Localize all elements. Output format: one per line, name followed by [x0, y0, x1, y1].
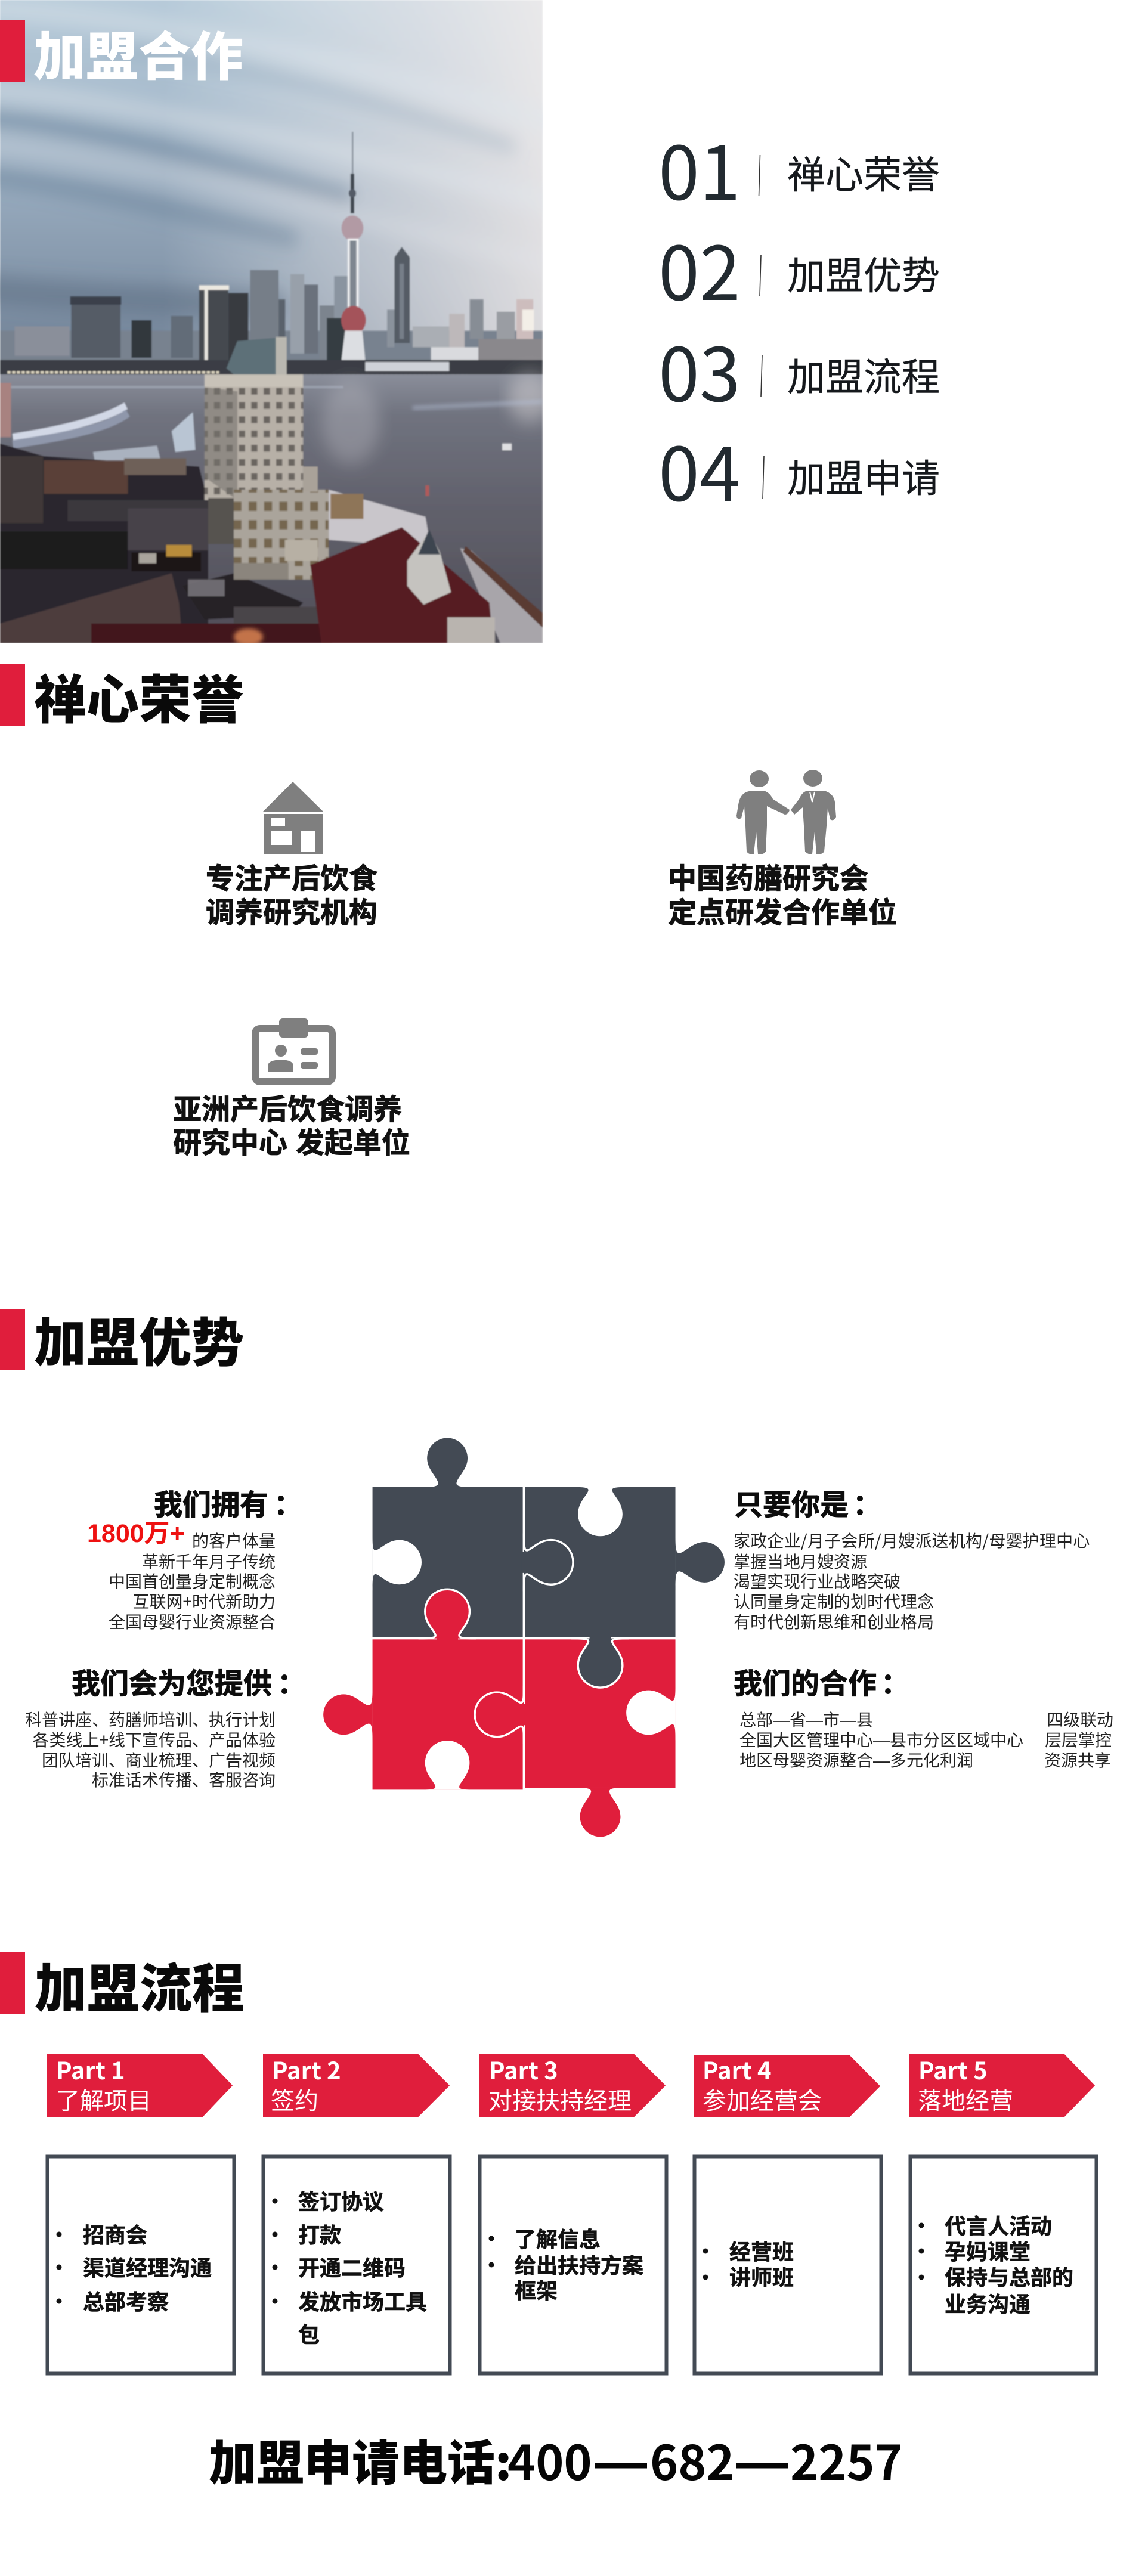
card: step 5 list: 保持与总部的 [945, 2261, 1073, 2292]
text block: 我们会为您提供: 我们会为您提供： [72, 1660, 306, 1702]
puzzle interlocks [419, 1533, 629, 1744]
item 02: 加盟优势 [787, 246, 940, 301]
text block: 我们拥有: 中国首创量身定制概念 [109, 1569, 276, 1593]
text block: 我们的合作: 总部—省—市—县 [739, 1707, 873, 1731]
text block: 只要你是: 渴望实现行业战略突破 [734, 1569, 900, 1593]
text block: 只要你是: 有时代创新思维和创业格局 [734, 1609, 934, 1633]
section bar: 加盟优势 [0, 1309, 25, 1370]
callout: application phone number: 682 [650, 2425, 735, 2494]
arrow: Part 3: 对接扶持经理 [488, 2082, 632, 2116]
text block: 我们的合作: 我们的合作： [734, 1660, 909, 1702]
card: step 2 list [264, 2156, 450, 2373]
text block: 只要你是 [734, 1481, 1090, 1633]
card: step 2 list: 打款 [298, 2218, 341, 2249]
text block: 我们拥有: 革新千年月子传统 [142, 1549, 276, 1573]
card: step 1 list: 渠道经理沟通 [83, 2251, 212, 2282]
card: step 3 list: 给出扶持方案 [515, 2249, 643, 2280]
item 03: 加盟流程 [787, 347, 940, 402]
honor text 1: 调养研究机构 [206, 889, 377, 931]
arrow: Part 2: 签约 [271, 2082, 318, 2116]
heading: 禅心荣誉: 禅心荣誉 [34, 658, 244, 734]
arrow: Part 3: Part 3 [489, 2052, 558, 2086]
text block: 我们拥有: 1800万+ [87, 1519, 185, 1548]
photo: Shanghai skyline and river [0, 0, 562, 645]
item 01: 01 [658, 114, 741, 221]
callout: application phone number: 400 [507, 2425, 592, 2494]
card: step 4 list [694, 2156, 881, 2373]
arrow: Part 4 [694, 2052, 880, 2117]
section bar: 禅心荣誉 [0, 664, 25, 726]
item 03 [658, 315, 940, 423]
text block: 我们会为您提供: 各类线上+线下宣传品、产品体验 [32, 1727, 276, 1751]
honor text 1: 专注产后饮食 [206, 855, 377, 897]
text block: 我们拥有: 全国母婴行业资源整合 [109, 1609, 276, 1633]
card: step 2 list: 签订协议 [298, 2185, 384, 2216]
section bar: 加盟流程 [0, 1952, 25, 2014]
honor text 3: 研究中心 发起单位 [173, 1119, 410, 1161]
text block: 只要你是: 只要你是： [734, 1481, 881, 1523]
sub: riverside embankment and red roofs [285, 485, 543, 643]
card: step 5 list: 业务沟通 [945, 2287, 1030, 2318]
arrow: Part 5 [909, 2052, 1095, 2117]
text block: 我们拥有: 互联网+时代新助力 [132, 1589, 276, 1613]
chart: four-piece jigsaw puzzle [323, 1438, 725, 1837]
card: step 1 list [48, 2156, 234, 2373]
text block: 只要你是: 认同量身定制的划时代理念 [734, 1589, 934, 1613]
item 04: 04 [658, 415, 741, 522]
card: step 2 list: 发放市场工具 [298, 2285, 427, 2316]
card: step 1 list: 招商会 [83, 2218, 147, 2249]
arrow: Part 1: Part 1 [56, 2052, 125, 2086]
sub: left city blocks [0, 444, 332, 645]
card: step 3 list: 了解信息 [515, 2222, 601, 2253]
card: step 5 list [910, 2156, 1096, 2373]
text block: 我们拥有: 我们拥有： [154, 1481, 302, 1523]
text block: 我们的合作: 资源共享 [1044, 1748, 1111, 1772]
text block: 我们的合作: 四级联动 [1047, 1707, 1113, 1731]
arrow: Part 5: Part 5 [918, 2052, 988, 2086]
arrow: Part 1 [47, 2052, 233, 2117]
arrow: Part 2: Part 2 [272, 2052, 341, 2086]
arrow: Part 1: 了解项目 [56, 2082, 151, 2116]
honor text 3: 亚洲产后饮食调养 [173, 1086, 402, 1128]
icon: house [263, 782, 323, 854]
callout: application phone number: — [595, 2432, 647, 2491]
item 04: 加盟申请 [787, 448, 940, 503]
puzzle piece: top dark [373, 1438, 725, 1637]
card: step 3 list: 框架 [515, 2274, 558, 2305]
puzzle notches [373, 1487, 676, 1789]
text block: 只要你是: 掌握当地月嫂资源 [734, 1549, 867, 1573]
arrow: Part 2 [263, 2052, 450, 2117]
heading: 加盟优势: 加盟优势 [34, 1301, 244, 1377]
card: step 1 list: 总部考察 [83, 2285, 169, 2316]
item 01: 禅心荣誉 [787, 145, 940, 200]
text block: 我们会为您提供: 团队培训、商业梳理、广告视频 [42, 1748, 276, 1772]
card: step 5 list: 代言人活动 [945, 2209, 1052, 2240]
text block: 我们会为您提供: 标准话术传播、客服咨询 [92, 1767, 276, 1791]
card: step 4 list: 讲师班 [729, 2261, 794, 2292]
item 02: 02 [658, 214, 741, 321]
text block: 只要你是: 家政企业/月子会所/月嫂派送机构/母婴护理中心 [734, 1528, 1090, 1552]
sub: far skyline [0, 247, 543, 376]
item 03: 03 [658, 315, 741, 423]
card: step 4 list: 经营班 [729, 2235, 794, 2266]
sub: hotel tower [205, 337, 329, 580]
sub: Oriental Pearl Tower [341, 132, 366, 360]
heading: 加盟流程: 加盟流程 [35, 1947, 245, 2023]
card: step 3 list [479, 2156, 667, 2373]
arrow: Part 4: 参加经营会 [703, 2082, 822, 2116]
table of contents [658, 114, 940, 522]
text block: 我们的合作: 层层掌控 [1045, 1727, 1112, 1751]
callout: application phone number: — [736, 2432, 788, 2491]
text block: 我们的合作: 全国大区管理中心—县市分区区域中心 [739, 1727, 1023, 1751]
callout: application phone number: 加盟申请电话: [209, 2425, 512, 2494]
honor text 2: 中国药膳研究会 [668, 855, 868, 897]
puzzle piece: bottom red [323, 1639, 676, 1837]
callout: application phone number: 2257 [790, 2425, 903, 2494]
text block: 我们拥有 [87, 1481, 302, 1633]
item 01 [658, 114, 940, 221]
honor text 3 [173, 1086, 410, 1161]
honor text 2 [668, 855, 897, 931]
text block: 我们会为您提供: 科普讲座、药膳师培训、执行计划 [25, 1707, 276, 1731]
card: step 2 list: 包 [298, 2318, 320, 2349]
arrow: Part 5: 落地经营 [918, 2082, 1013, 2116]
text block: 我们拥有: 的客户体量 [192, 1528, 276, 1552]
section bar: 加盟合作 [0, 20, 25, 82]
item 02 [658, 214, 940, 321]
title: 加盟合作: 加盟合作 [33, 15, 243, 91]
card: step 5 list: 孕妈课堂 [945, 2235, 1030, 2266]
honor text 2: 定点研发合作单位 [668, 889, 897, 931]
item 04 [658, 415, 940, 522]
text block: 我们的合作: 地区母婴资源整合—多元化利润 [739, 1748, 973, 1772]
honor text 1 [206, 855, 377, 931]
icon: handshake [736, 770, 836, 854]
arrow: Part 4: Part 4 [703, 2052, 772, 2086]
text block: 我们的合作 [734, 1660, 1113, 1772]
icon: ID badge [255, 1018, 332, 1082]
sub: river [0, 373, 552, 643]
card: step 2 list: 开通二维码 [298, 2251, 406, 2282]
arrow: Part 3 [479, 2052, 666, 2117]
text block: 我们会为您提供 [25, 1660, 306, 1791]
